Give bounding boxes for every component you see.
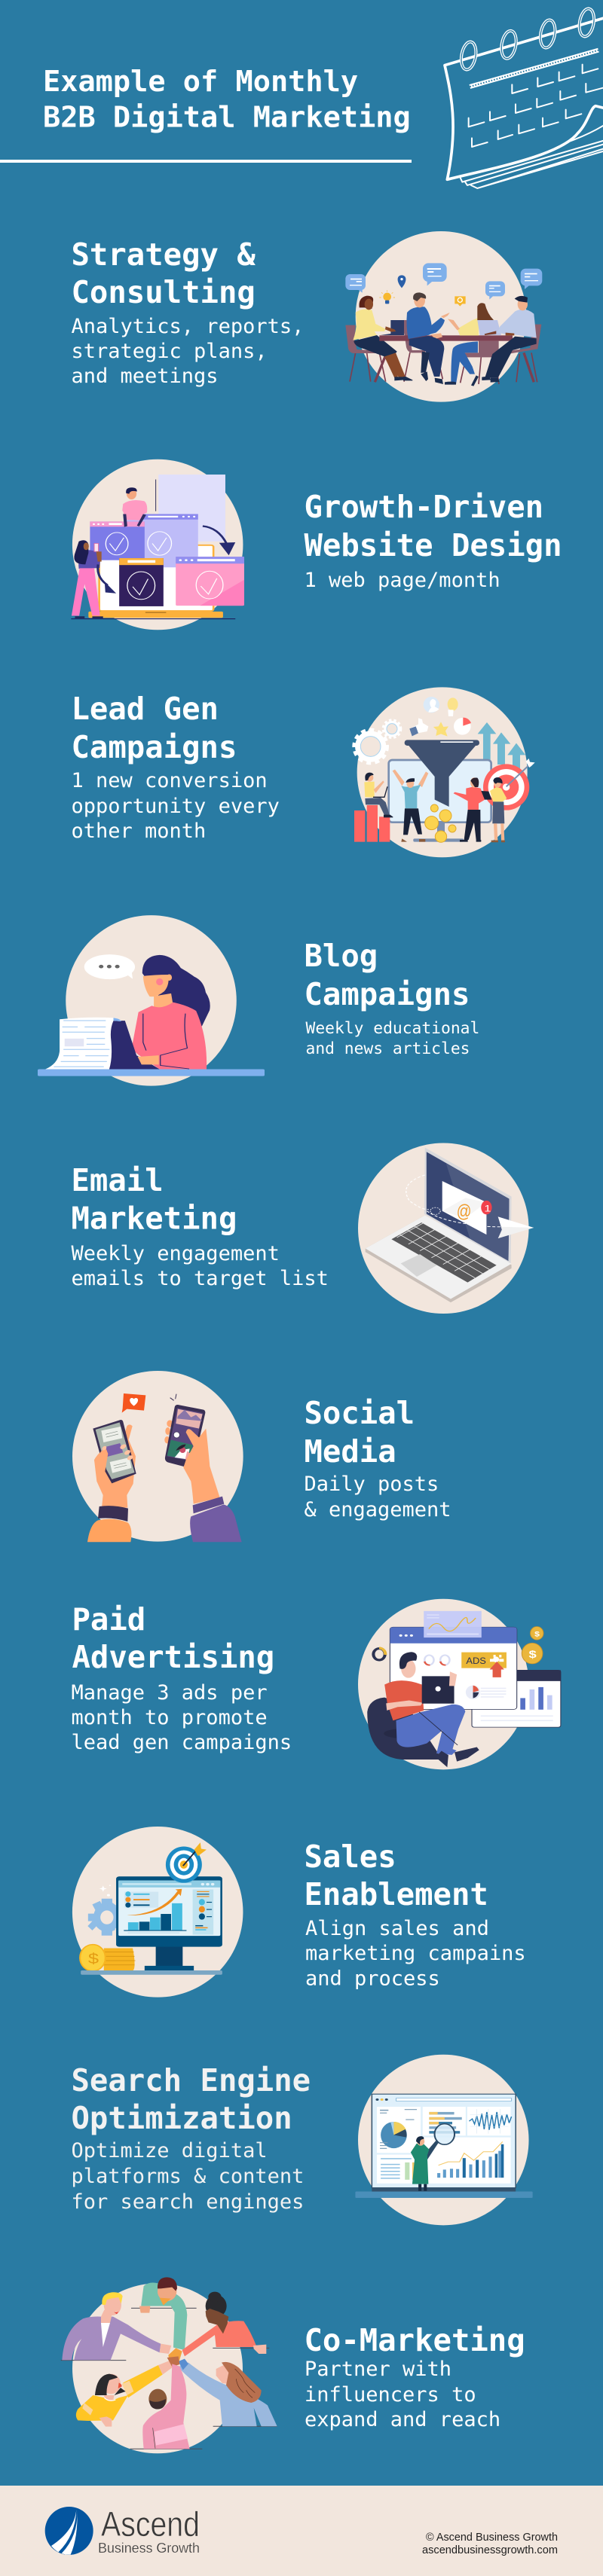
description: influencers to xyxy=(305,2383,476,2407)
description: Analytics, reports, xyxy=(71,315,304,338)
icon: yellow tag xyxy=(455,296,466,307)
icon: location pin xyxy=(398,275,406,288)
footer band xyxy=(0,2486,603,2576)
illustration: website windows xyxy=(71,459,244,630)
illustration: hands holding phones xyxy=(72,1371,243,1542)
description: Daily posts xyxy=(305,1473,439,1496)
description: and news articles xyxy=(306,1039,470,1058)
description: for search enginges xyxy=(71,2190,304,2214)
heading: Campaigns xyxy=(71,729,237,765)
illustration: ads dashboard: ADS xyxy=(466,1656,486,1665)
icon: light bulb xyxy=(379,290,395,304)
heading: Co-Marketing xyxy=(305,2322,525,2358)
heading: Social xyxy=(305,1395,415,1431)
logo wordmark: Business Growth xyxy=(98,2541,200,2556)
illustration: laptop with email: @ xyxy=(457,1201,472,1222)
description: platforms & content xyxy=(71,2165,304,2188)
description: strategic plans, xyxy=(71,340,268,363)
panel: growth-driven website design xyxy=(71,459,562,630)
heading: Paid xyxy=(72,1601,145,1637)
illustration: ads dashboard: $ xyxy=(534,1631,540,1638)
panel: email marketing xyxy=(71,1143,534,1314)
illustration: team meeting xyxy=(345,231,542,402)
illustration: monitor with target xyxy=(72,1827,243,1998)
description: & engagement xyxy=(305,1498,451,1521)
panel: search engine optimization xyxy=(71,2055,533,2225)
title: Example of Monthly xyxy=(43,65,358,99)
description: month to promote xyxy=(71,1706,268,1729)
description: 1 new conversion xyxy=(71,769,268,792)
icon: calendar xyxy=(445,8,603,188)
heading: Strategy & xyxy=(71,237,256,273)
description: other month xyxy=(71,819,206,843)
title underline xyxy=(0,160,412,163)
description: opportunity every xyxy=(71,795,280,818)
description: and process xyxy=(305,1967,440,1990)
description: Manage 3 ads per xyxy=(71,1681,268,1705)
description: and meetings xyxy=(71,365,219,388)
description: Optimize digital xyxy=(71,2139,268,2162)
illustration: monitor with target: $ xyxy=(88,1951,99,1967)
heading: Search Engine xyxy=(71,2062,311,2098)
panel: social media xyxy=(72,1371,451,1542)
logo: ascend emblem xyxy=(45,2507,93,2555)
panel: lead gen campaigns xyxy=(71,687,535,857)
illustration: blogger at desk xyxy=(38,915,265,1086)
illustration: team hands together xyxy=(61,2277,277,2453)
illustration: laptop with email: 1 xyxy=(484,1204,491,1214)
heading: Optimization xyxy=(71,2100,292,2136)
copyright: © Ascend Business Growth xyxy=(426,2531,558,2544)
description: 1 web page/month xyxy=(305,569,500,592)
description: marketing campains xyxy=(305,1942,526,1965)
heading: Growth-Driven xyxy=(305,489,543,525)
panel: paid advertising xyxy=(71,1599,561,1769)
header xyxy=(0,8,603,188)
panel: blog campaigns xyxy=(38,915,479,1086)
illustration: ads dashboard: $ xyxy=(529,1649,537,1661)
description: Weekly educational xyxy=(306,1019,479,1038)
heading: Media xyxy=(305,1433,396,1470)
description: Align sales and xyxy=(305,1917,489,1940)
description: lead gen campaigns xyxy=(71,1731,292,1754)
panel: sales enablement xyxy=(72,1827,526,1998)
description: Partner with xyxy=(305,2358,451,2381)
illustration: ads dashboard xyxy=(358,1599,561,1769)
description: emails to target list xyxy=(71,1267,329,1290)
illustration: analytics dashboard xyxy=(355,2055,533,2225)
heading: Marketing xyxy=(71,1201,237,1237)
illustration: sales funnel xyxy=(354,687,535,857)
heading: Sales xyxy=(305,1839,396,1875)
heading: Advertising xyxy=(72,1639,274,1675)
copyright: ascendbusinessgrowth.com xyxy=(422,2544,558,2556)
description: Weekly engagement xyxy=(71,1242,280,1265)
panel: co-marketing xyxy=(61,2277,525,2453)
panel: strategy and consulting xyxy=(71,231,542,402)
heading: Consulting xyxy=(71,274,256,310)
logo wordmark: Ascend xyxy=(101,2504,200,2544)
title: B2B Digital Marketing xyxy=(43,101,411,134)
description: expand and reach xyxy=(305,2408,500,2431)
heading: Blog xyxy=(305,938,378,974)
heading: Lead Gen xyxy=(71,691,219,727)
heading: Website Design xyxy=(305,527,562,563)
heading: Enablement xyxy=(305,1876,488,1912)
heading: Email xyxy=(71,1162,164,1198)
illustration: laptop with email xyxy=(358,1143,534,1314)
heading: Campaigns xyxy=(305,976,470,1012)
